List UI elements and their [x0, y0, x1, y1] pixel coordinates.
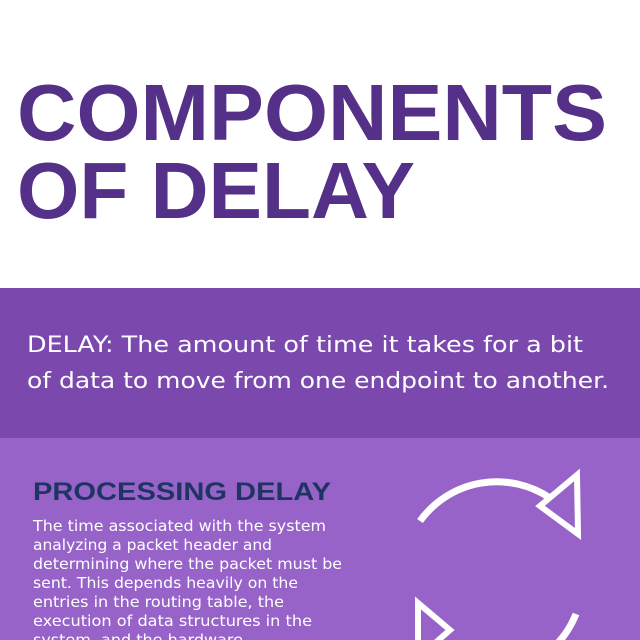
title: COMPONENTS [17, 68, 607, 157]
title: OF DELAY [17, 146, 415, 235]
body text: analyzing a packet header and [33, 536, 272, 554]
panel: definition band [0, 288, 640, 438]
body text: sent. This depends heavily on the [33, 574, 298, 592]
definition text [27, 333, 609, 394]
definition text: of data to move from one endpoint to another. [27, 369, 609, 394]
body text: execution of data structures in the [33, 612, 312, 630]
body text [32, 517, 342, 640]
title [17, 68, 607, 235]
body text: entries in the routing table, the [33, 593, 284, 611]
body text: determining where the packet must be [33, 555, 342, 573]
body text: The time associated with the system [32, 517, 326, 535]
panel: processing delay [0, 438, 640, 640]
definition text: DELAY: The amount of time it takes for a bit [27, 333, 583, 358]
icon: cycle arrows [415, 468, 582, 640]
heading: processing delay: PROCESSING DELAY [33, 478, 331, 506]
